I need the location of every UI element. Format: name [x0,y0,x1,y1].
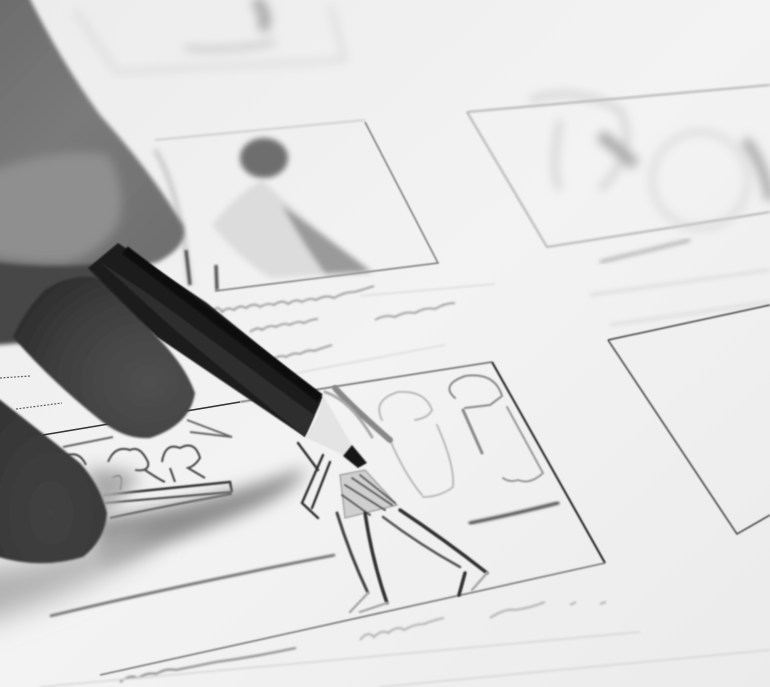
icon: hand holding pencil [0,0,195,563]
icon: pencil [88,243,367,468]
pencil: sharpened wood [305,395,353,456]
hand: ring finger [0,396,107,563]
sketch: walking figure [298,388,558,612]
panel: upper middle storyboard frame [155,120,438,291]
pencil: barrel [88,243,323,437]
text block: handwritten caption under main frame [40,602,770,687]
dashed rule at left of paper [0,376,62,409]
panel: top blurred sketch [75,0,345,72]
hand: palm shadow [0,262,110,345]
sketch: background figures [379,375,543,497]
text block: handwritten caption under upper frame [212,284,495,378]
sketch: long ground stroke [50,555,335,616]
shadow: hand cast on paper [0,468,305,630]
pencil: barrel facet [100,262,314,437]
panel: right empty storyboard frame [608,305,770,534]
hand: index fingertip [0,152,121,262]
panel: upper right storyboard frame [467,85,770,325]
pencil: black edge [125,250,320,398]
hand: middle finger [13,277,195,438]
hand: back of index finger [0,0,184,275]
sketch: small figures at left of frame [60,420,232,518]
panel: main storyboard frame [43,362,605,675]
pencil: lead tip [343,445,367,468]
